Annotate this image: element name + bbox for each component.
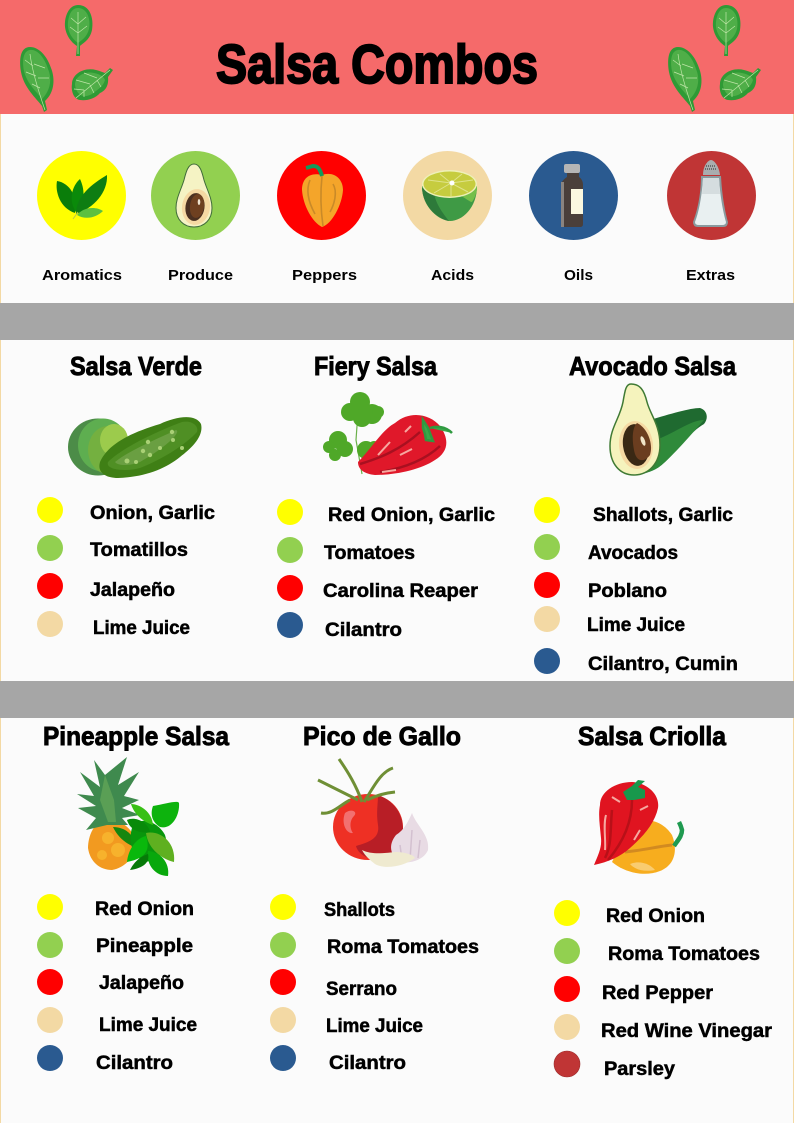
category: extras: Extras [686,267,735,284]
category: acids: Acids [431,267,474,284]
ingredient list: Roma Tomatoes [327,937,479,958]
panel: Pineapple Salsa [37,721,230,1074]
ingredient list: Parsley [604,1059,675,1080]
panel: Salsa Criolla [554,721,773,1080]
panel: Pico de Gallo [270,721,479,1074]
divider bar middle [0,681,794,718]
category: aromatics: Aromatics [42,267,122,284]
heading: Pineapple Salsa [43,721,230,751]
ingredient list: Lime Juice [99,1015,197,1036]
ingredient list: Onion, Garlic [90,503,215,524]
ingredient list: Shallots [324,900,395,921]
ingredient list: Jalapeño [99,973,184,994]
ingredient list [37,497,215,639]
heading: Salsa Criolla [578,721,727,751]
ingredient list: Cilantro, Cumin [588,654,738,675]
category: oils: Oils [564,267,593,284]
ingredient list: Tomatillos [90,540,188,561]
ingredient list: Tomatoes [324,543,415,564]
ingredient list [277,499,495,641]
ingredient list: Shallots, Garlic [593,505,733,526]
panel: Fiery Salsa [277,351,495,641]
ingredient list: Lime Juice [93,618,190,639]
ingredient list: Red Onion, Garlic [328,505,495,526]
panel: category legend [37,151,756,284]
illustration: avocado [610,384,707,475]
category: aromatics [37,151,126,284]
ingredient list: Roma Tomatoes [608,944,760,965]
illustration: cilantro and red pepper [323,392,452,475]
ingredient list: Lime Juice [587,615,685,636]
category: produce [151,151,240,284]
ingredient list: Pineapple [96,936,193,957]
ingredient list: Lime Juice [326,1016,423,1037]
illustration: red and yellow peppers [594,780,682,874]
ingredient list: Cilantro [329,1053,406,1074]
header banner [0,0,794,114]
category: extras [667,151,756,284]
illustration: tomato and garlic [318,759,428,867]
ingredient list: Red Pepper [602,983,714,1004]
illustration: tomatillo and cucumber [68,417,201,478]
ingredient list [37,894,197,1074]
title: Salsa Combos [216,33,538,95]
ingredient list: Red Wine Vinegar [601,1021,773,1042]
category: peppers [277,151,366,284]
ingredient list: Avocados [588,543,678,564]
divider bar top [0,303,794,340]
ingredient list [554,900,773,1080]
illustration: pineapple and basil [77,757,179,876]
ingredient list: Carolina Reaper [323,581,479,602]
ingredient list: Serrano [326,979,397,1000]
ingredient list: Poblano [588,581,667,602]
ingredient list [534,497,738,675]
heading: Fiery Salsa [314,351,437,381]
heading: Avocado Salsa [569,351,736,381]
ingredient list: Cilantro [325,620,402,641]
category: produce: Produce [168,267,233,284]
ingredient list: Red Onion [95,899,194,920]
ingredient list: Jalapeño [90,580,175,601]
panel: Salsa Verde [37,351,215,639]
category: oils [529,151,618,284]
icon: spinach leaves right [668,5,761,112]
category: acids [403,151,492,284]
ingredient list [270,894,479,1074]
heading: Salsa Verde [70,351,202,381]
icon: spinach leaves left [20,5,113,112]
ingredient list: Cilantro [96,1053,173,1074]
ingredient list: Red Onion [606,906,705,927]
category: peppers: Peppers [292,267,357,284]
panel: Avocado Salsa [534,351,738,675]
heading: Pico de Gallo [303,721,461,751]
